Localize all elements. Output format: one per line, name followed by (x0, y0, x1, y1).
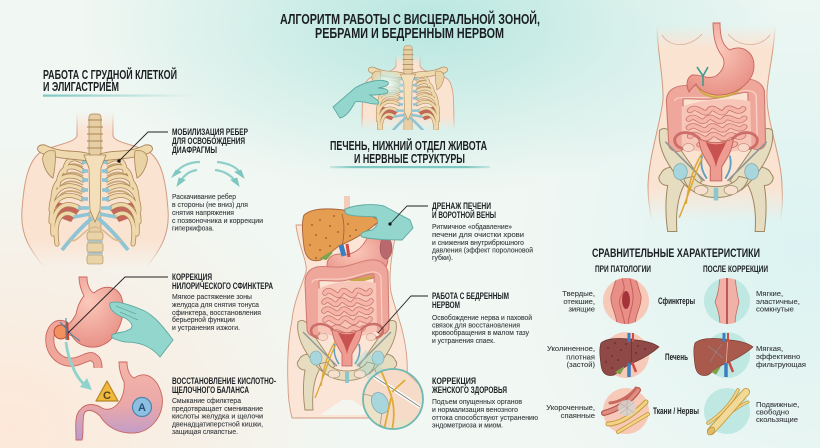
text: rib mobilisation description: в стороны (не вниз) для (172, 200, 248, 209)
callout: rib mobilisation: ДЛЯ ОСВОБОЖДЕНИЯ (172, 136, 245, 146)
callout: femoral nerve: НЕРВОМ (432, 300, 460, 310)
heading: liver section: ПЕЧЕНЬ, НИЖНИЙ ОТДЕЛ ЖИВОТА (330, 138, 487, 153)
row: sphincters (562, 276, 800, 326)
illustration: full abdomen overview (648, 23, 782, 232)
sub-illustration: liver (302, 209, 379, 261)
callout: liver drainage (388, 201, 533, 262)
callout: acid-base balance: Смыкание сфилктера (172, 396, 242, 405)
illustration: stomach acid balance (76, 362, 162, 440)
label: sphincter pathology: Твердые, (562, 289, 595, 298)
callout: liver drainage: и снижения внутрибрюшного (432, 238, 524, 247)
callout: acid-base balance: кислоты желудка и щелочи (172, 412, 263, 420)
label: liver corrected (756, 344, 806, 369)
text: rib mobilisation description: с позвоночника и коррекции (172, 216, 263, 225)
callout: women's health: КОРРЕКЦИЯ (432, 376, 476, 386)
callout: acid-base balance: ЩЕЛОЧНОГО БАЛАНСА (172, 385, 249, 395)
text: rib mobilisation description: гиперкифоза. (172, 224, 214, 232)
title: АЛГОРИТМ РАБОТЫ С ВИСЦЕРАЛЬНОЙ ЗОНОЙ, (280, 10, 540, 28)
callout: pyloric sphincter: Мягкое растяжение зоны (172, 292, 252, 301)
callout: pyloric sphincter: и устранения изжоги. (172, 323, 240, 332)
label: tissues pathology: Укороченные, (546, 403, 595, 412)
inset: femoral nerve magnifier (354, 350, 424, 430)
label: tissues and nerves: Ткани / Нервы (653, 406, 699, 416)
callout: women's health: эндометриоза и миом. (432, 420, 503, 430)
illustration: abdomen anatomy (288, 196, 425, 440)
label: sphincter corrected: эластичные, (756, 297, 800, 306)
label: tissues pathology: спаянные (561, 411, 595, 420)
text: rib mobilisation description (172, 192, 263, 232)
callout: liver drainage: губки). (432, 253, 453, 262)
callout: rib mobilisation: ДИАФРАГМЫ (172, 145, 217, 155)
callout: pyloric sphincter (68, 272, 273, 333)
callout: acid-base balance: двенадцатиперстной кишки, (172, 420, 263, 428)
callout: women's health: Подъем опущенных органов (432, 397, 522, 406)
icon: gloved hand on liver (345, 205, 413, 240)
illustration: upper chest with gloved hand (332, 46, 454, 130)
callout: acid-base balance: предотвращает сменивание (172, 404, 263, 413)
text: rib mobilisation description: снятия напряжения (172, 208, 234, 217)
column header: pathology: ПРИ ПАТОЛОГИИ (595, 264, 651, 274)
column header: after correction: ПОСЛЕ КОРРЕКЦИИ (703, 264, 768, 274)
panel: comparative characteristics (546, 246, 806, 436)
label: tissues pathology (546, 403, 595, 420)
label: sphincters: Сфинктеры (658, 296, 695, 306)
label: tissues corrected (756, 400, 799, 424)
callout: acid-base balance (172, 376, 276, 436)
sub-illustration: pelvis (297, 320, 397, 410)
sub-illustration: stomach (327, 236, 388, 280)
label: sphincter corrected: сомкнутые (756, 304, 794, 314)
icon: rib motion arrows (172, 162, 244, 186)
icon: liver pathology (600, 332, 659, 378)
label: liver pathology (547, 344, 595, 369)
callout: pyloric sphincter: НИЛОРИЧЕСКОГО СФИНКТЕРА (172, 281, 273, 291)
label: liver corrected: эффективно (756, 352, 800, 361)
row: liver (547, 332, 806, 378)
icon: sphincter pathology (603, 276, 649, 326)
callout: women's health: оттока способствуют устранению (432, 413, 538, 422)
sub-illustration: uterus and nerves (303, 324, 391, 398)
callout: pyloric sphincter: желудса для снятия тонуса (172, 300, 260, 309)
heading: chest section: И ЭЛИГАСТРИЕМ (43, 80, 119, 94)
callout: liver drainage: ДРЕНАЖ ПЕЧЕНИ (432, 201, 491, 211)
row: tissues and nerves (546, 388, 799, 436)
label: sphincter corrected (756, 289, 800, 314)
callout: liver drainage: давления (эффект поролоновой (432, 246, 533, 254)
callout: femoral nerve (378, 291, 532, 345)
heading: chest section: РАБОТА С ГРУДНОЙ КЛЕТКОЙ (43, 67, 177, 82)
label: sphincter pathology (562, 289, 595, 314)
icon: sphincter corrected (704, 276, 750, 326)
label: liver: Печень (665, 352, 688, 362)
callout: women's health: и нормализация венозного (432, 405, 518, 414)
callout: women's health (431, 376, 538, 430)
callout: liver drainage: И ВОРОТНОЙ ВЕНЫ (432, 209, 496, 220)
heading: comparison: СРАВНИТЕЛЬНЫЕ ХАРАКТЕРИСТИКИ (592, 246, 760, 260)
panel: liver, lower abdomen, nerves (288, 138, 538, 440)
title: РЕБРАМИ И БЕДРЕННЫМ НЕРВОМ (315, 26, 504, 42)
label: liver corrected: Мягкая, (756, 344, 783, 353)
panel: chest and epigastrium (22, 67, 276, 440)
icon: tissues corrected (704, 388, 750, 436)
callout: femoral nerve: Освобождение нерва и паховой (432, 313, 532, 322)
text: rib mobilisation description: Раскачивание ребер (172, 192, 236, 201)
callout: women's health: ЖЕНСКОГО ЗДОРОВЬЯ (431, 385, 507, 395)
callout: rib mobilisation: МОБИЛИЗАЦИЯ РЕБЕР (172, 127, 248, 137)
icon: tissues pathology (603, 388, 649, 434)
label: tissues corrected: скользящие (756, 415, 798, 424)
callout: acid-base balance: защищая сляапстые. (172, 427, 238, 436)
label: sphincter pathology: отекшие, (563, 297, 595, 306)
callout: pyloric sphincter: берьерной функции (172, 315, 235, 324)
label: tissues corrected: свободно (756, 408, 789, 416)
callout: pyloric sphincter: сфинктера, восстановления (172, 308, 261, 317)
callout: liver drainage: печени для очистки хрови (432, 230, 524, 239)
label: liver pathology: плотная (566, 352, 595, 362)
heading: liver section (330, 138, 490, 168)
icon: liver corrected (694, 332, 753, 378)
illustration: ribcage (22, 112, 168, 268)
label: sphincter pathology: зиящие (568, 304, 595, 314)
icon: acid C: C (103, 390, 111, 402)
label: tissues corrected: Подвижные, (756, 400, 799, 409)
icon: alkaline A: A (138, 402, 146, 414)
label: sphincter corrected: Мягкие, (756, 289, 783, 298)
callout: rib mobilisation (117, 127, 248, 163)
callout: pyloric sphincter: КОРРЕКЦИЯ (172, 272, 212, 282)
illustration: stomach with gloved hand (50, 277, 173, 368)
callout: liver drainage: Ритмичное «обдавление» (432, 222, 512, 231)
callout: femoral nerve: кровообращения в малом тазу (432, 328, 529, 337)
label: liver pathology: Уколиненное, (547, 344, 595, 353)
callout: acid-base balance: ВОССТАНОВЛЕНИЕ КИСЛОТНО- (172, 376, 276, 386)
arrow: sphincter to stomach (66, 342, 92, 390)
sub-illustration: intestines (312, 267, 382, 337)
callout: femoral nerve: и устранения спаек. (432, 336, 495, 345)
label: liver corrected: фильтрующая (756, 360, 806, 369)
heading: liver section: И НЕРВНЫЕ СТРУКТУРЫ (354, 152, 465, 166)
callout: femoral nerve: РАБОТА С БЕДРЕННЫМ (432, 291, 509, 301)
callout: femoral nerve: связок для восстановления (432, 320, 520, 330)
label: liver pathology: (застой) (567, 360, 595, 369)
heading: chest section (43, 67, 193, 97)
title (280, 10, 540, 42)
